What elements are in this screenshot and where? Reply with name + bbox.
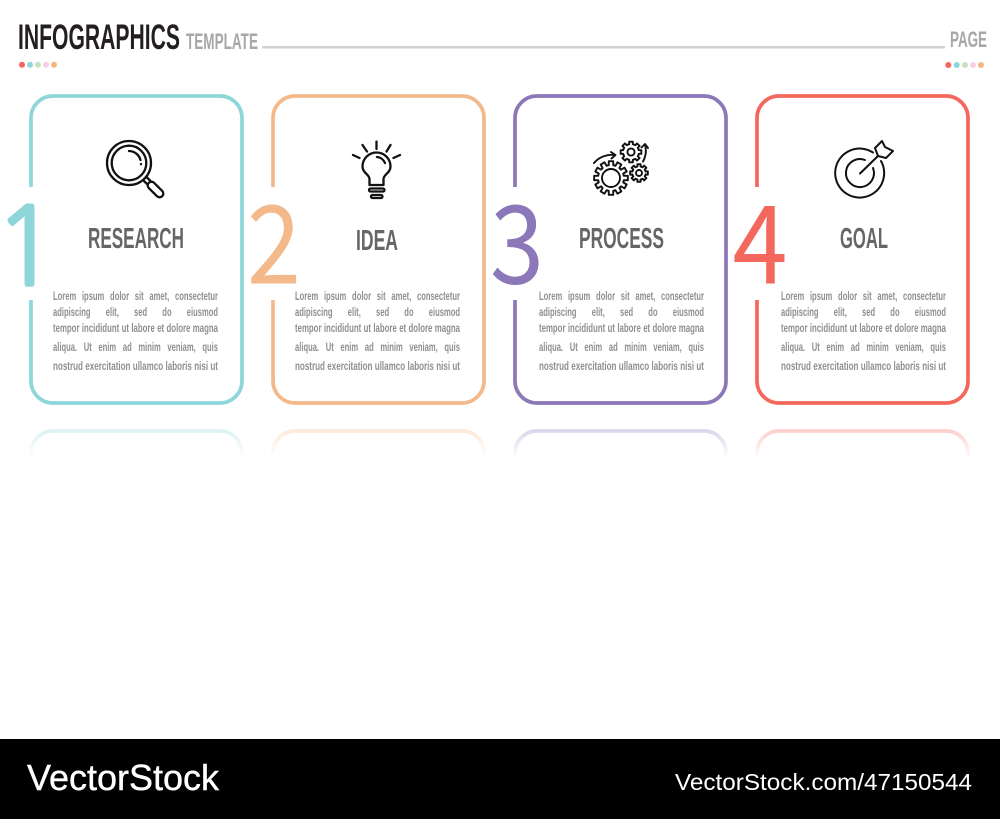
body text: nostrud exercitation ullamco laboris nisi ut [781, 361, 946, 373]
body text: Lorem ipsum dolor sit amet, consectetur [53, 291, 218, 303]
body text: adipiscing elit, sed do eiusmod [295, 307, 460, 319]
icon: light bulb [353, 142, 400, 198]
header [18, 18, 987, 68]
body text: tempor incididunt ut labore et dolore magna [539, 323, 704, 335]
body text: aliqua. Ut enim ad minim veniam, quis [781, 342, 946, 354]
body text: nostrud exercitation ullamco laboris nisi ut [539, 361, 704, 373]
icon: target [835, 141, 893, 198]
subtitle: TEMPLATE [186, 29, 258, 54]
icon: gears [594, 142, 648, 195]
number 2: 2 [247, 158, 301, 316]
panel: process [490, 94, 728, 405]
body text [539, 291, 704, 373]
body text: nostrud exercitation ullamco laboris nisi ut [295, 361, 460, 373]
body text: Lorem ipsum dolor sit amet, consectetur [781, 291, 946, 303]
body text [295, 291, 460, 373]
body text: tempor incididunt ut labore et dolore magna [53, 323, 218, 335]
footer image id: VectorStock.com/47150544 [675, 769, 972, 795]
heading: IDEA [356, 225, 398, 257]
body text: tempor incididunt ut labore et dolore magna [781, 323, 946, 335]
body text [781, 291, 946, 373]
card border [757, 96, 968, 403]
card border [273, 96, 484, 403]
heading: PROCESS [579, 223, 664, 255]
footer brand: VectorStock [27, 757, 220, 798]
number 3: 3 [490, 158, 544, 316]
body text: aliqua. Ut enim ad minim veniam, quis [539, 342, 704, 354]
body text: Lorem ipsum dolor sit amet, consectetur [539, 291, 704, 303]
card border [515, 96, 726, 403]
number 4: 4 [732, 158, 788, 316]
card border [31, 96, 242, 403]
body text: adipiscing elit, sed do eiusmod [539, 307, 704, 319]
body text: adipiscing elit, sed do eiusmod [781, 307, 946, 319]
body text: aliqua. Ut enim ad minim veniam, quis [295, 342, 460, 354]
footer bar [0, 739, 1000, 819]
body text: nostrud exercitation ullamco laboris nisi ut [53, 361, 218, 373]
title: INFOGRAPHICS [18, 18, 180, 57]
panel: goal [732, 94, 970, 405]
body text: adipiscing elit, sed do eiusmod [53, 307, 218, 319]
body text: tempor incididunt ut labore et dolore magna [295, 323, 460, 335]
left dots [19, 62, 57, 68]
heading: RESEARCH [88, 223, 184, 255]
card reflections [30, 429, 970, 454]
icon: magnifier [107, 141, 165, 199]
right dots [945, 62, 984, 68]
panel: research [0, 94, 244, 405]
body text: aliqua. Ut enim ad minim veniam, quis [53, 342, 218, 354]
body text [53, 291, 218, 373]
panel: idea [247, 94, 486, 405]
body text: Lorem ipsum dolor sit amet, consectetur [295, 291, 460, 303]
heading: GOAL [840, 223, 888, 255]
